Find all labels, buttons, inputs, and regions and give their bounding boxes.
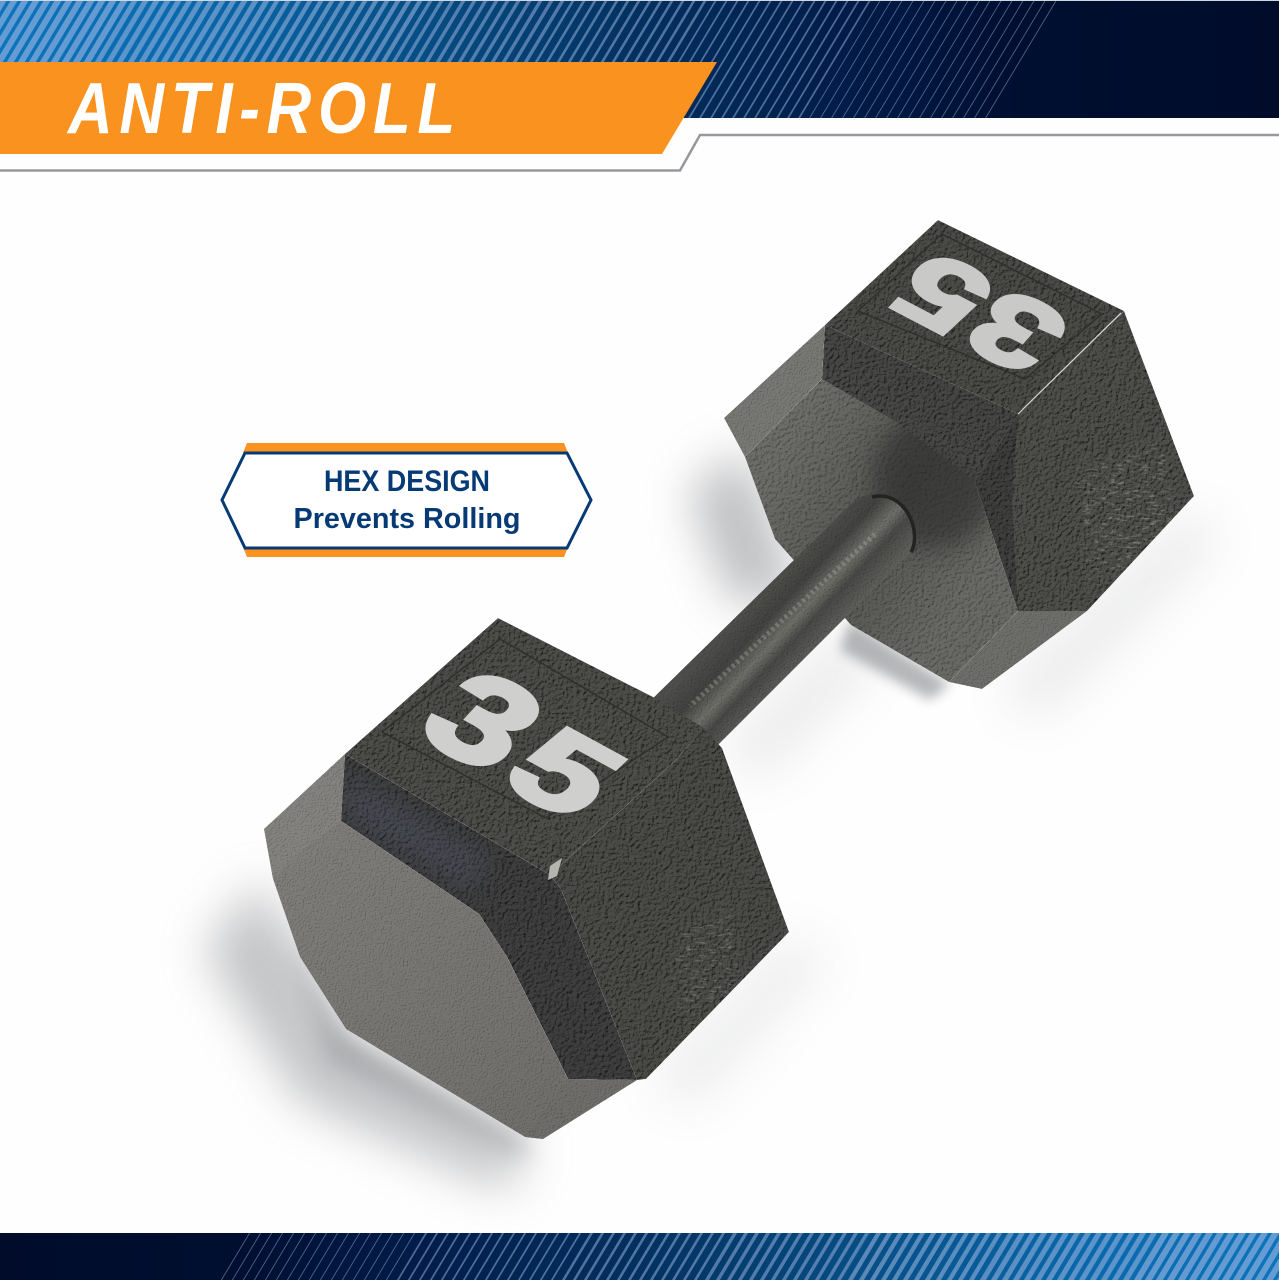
lower weight number: 5 <box>478 705 652 840</box>
title banner <box>0 62 717 154</box>
lower dumbbell head <box>264 618 789 1139</box>
callout heading: HEX DESIGN <box>324 465 490 498</box>
dumbbell handle <box>648 493 916 755</box>
upper weight number <box>869 232 1090 394</box>
upper weight number: 5 <box>869 232 1017 355</box>
callout subheading: Prevents Rolling <box>294 503 520 535</box>
header outline stroke <box>0 135 1279 170</box>
upper dumbbell head <box>724 220 1194 689</box>
dumbbell shadows <box>205 450 1220 1190</box>
title text: ANTI-ROLL <box>66 69 462 149</box>
lower weight number: 3 <box>394 645 573 796</box>
header band with diagonal stripes <box>0 0 1279 118</box>
footer band with diagonal stripes <box>0 1233 1279 1280</box>
dumbbell <box>264 220 1194 1139</box>
upper weight number: 3 <box>943 269 1090 394</box>
lower weight number <box>394 645 652 840</box>
callout: hex design <box>222 443 591 557</box>
